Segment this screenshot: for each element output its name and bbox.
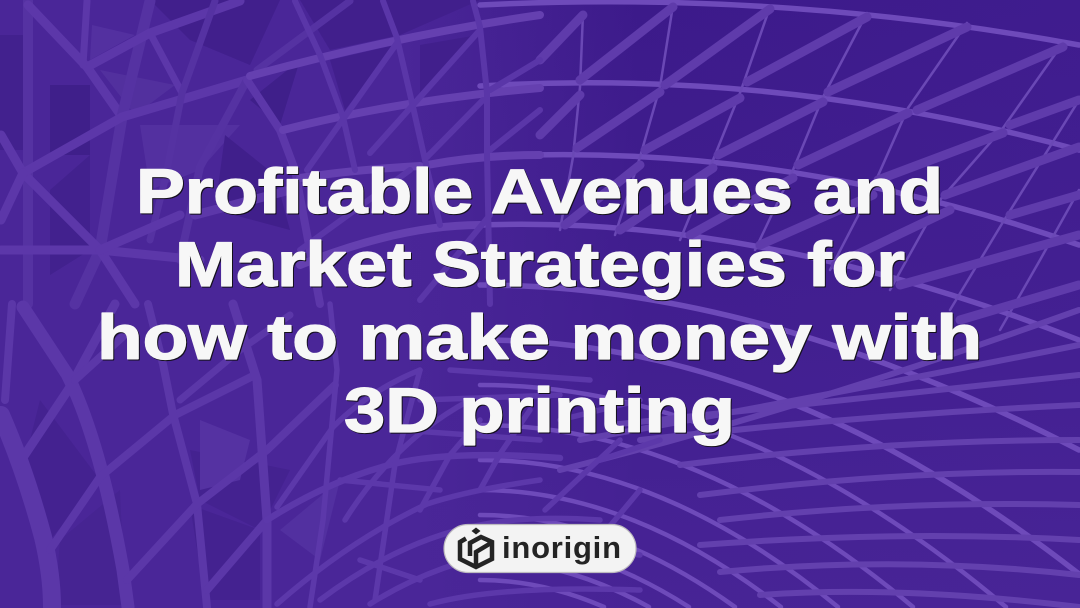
lower middle: dense arches <box>267 304 660 607</box>
title line 4: 3D printing <box>344 376 735 446</box>
logo badge <box>444 524 636 572</box>
badge pill <box>444 524 636 572</box>
lower right: fan of long beams <box>560 310 1079 607</box>
right dome: diagonal braces <box>540 7 1079 320</box>
upper left: lattice beams <box>1 1 350 304</box>
icon: inorigin hexagon mark <box>460 528 492 567</box>
lower left: curved trunk beams <box>1 304 335 607</box>
title line 3: how to make money with <box>97 303 982 373</box>
right dome: curved ribs <box>480 2 1079 607</box>
title <box>97 157 982 446</box>
right dome: thin radial ribs <box>560 5 1079 330</box>
title line 2: Market Strategies for <box>175 230 905 300</box>
upper middle: lattice arcs <box>250 15 540 265</box>
title line 1: Profitable Avenues and <box>136 157 943 227</box>
logo wordmark: inorigin <box>502 530 621 565</box>
